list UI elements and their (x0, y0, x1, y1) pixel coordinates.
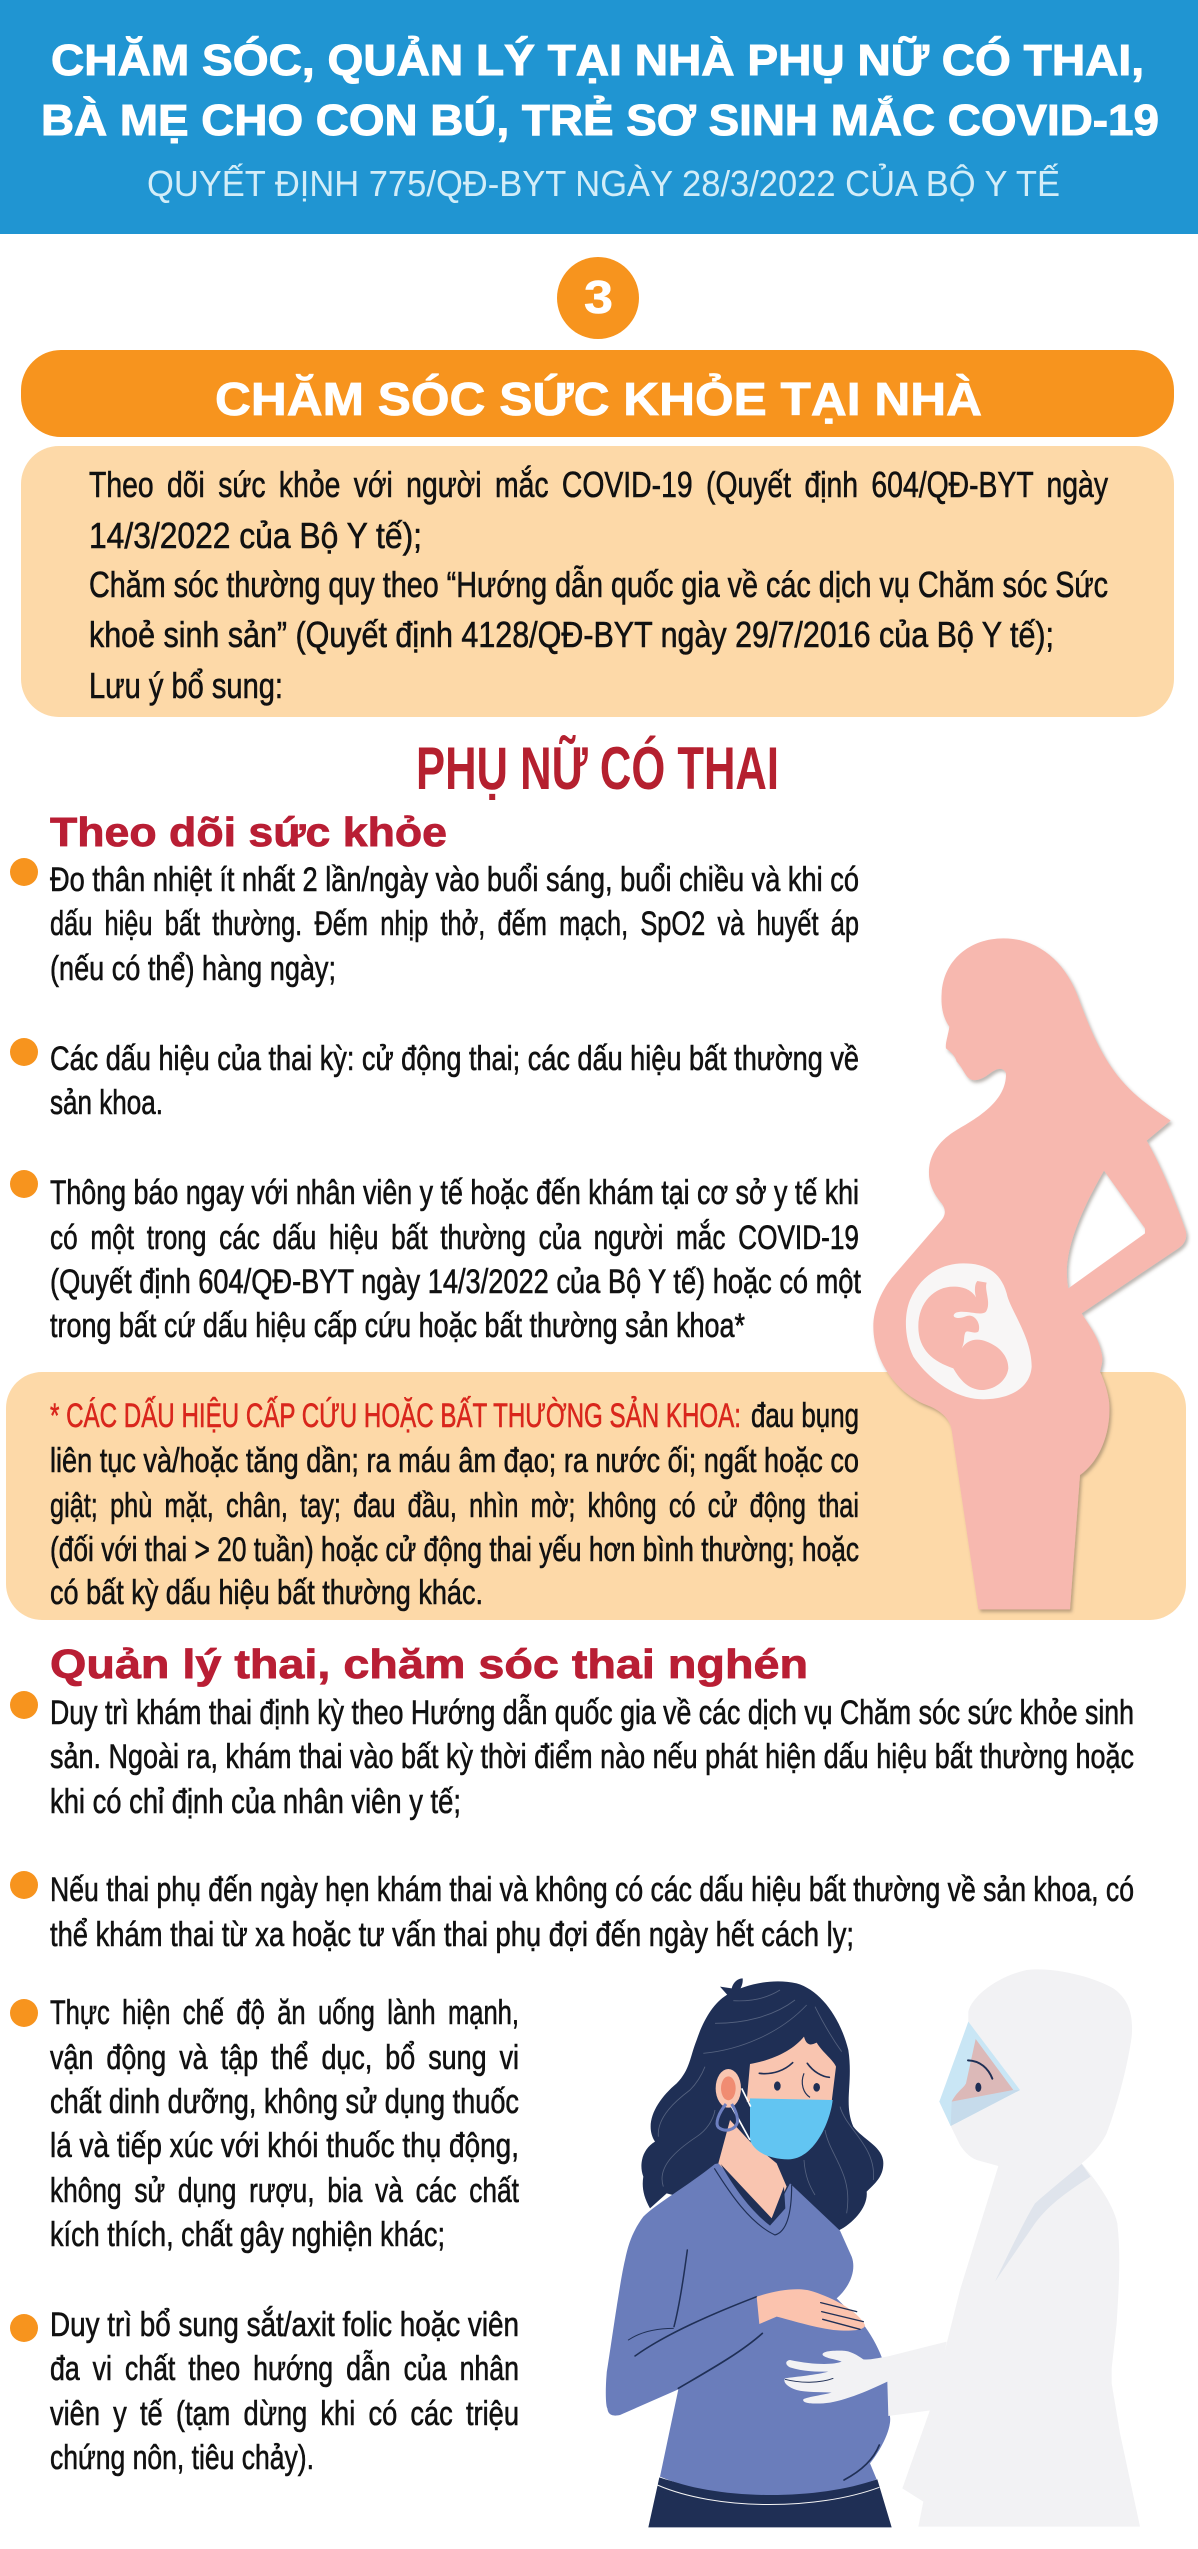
bullet: healthy diet: chất dinh dưỡng, không sử dụng thuốc (50, 2083, 519, 2121)
bullet: temperature: dấu hiệu bất thường. Đếm nhịp thở, đếm mạch, SpO2 và huyết áp (50, 905, 859, 943)
bullet: iron and folic acid: viên y tế (tạm dừng khi có các triệu (50, 2395, 519, 2433)
suit collar (995, 2164, 1091, 2282)
bullet: notify medical staff: trong bất cứ dấu hiệu cấp cứu hoặc bất thường sản khoa* (50, 1307, 745, 1345)
bullet: regular checkups (10, 1691, 1134, 1821)
woman's hand (757, 2289, 947, 2416)
bullet: healthy diet: không sử dụng rượu, bia và các chất (50, 2172, 519, 2210)
subtitle: QUYẾT ĐỊNH 775/QĐ-BYT NGÀY 28/3/2022 CỦA BỘ Y TẾ (147, 162, 1060, 204)
title: CHĂM SÓC, QUẢN LÝ TẠI NHÀ PHỤ NỮ CÓ THAI, (51, 35, 1144, 85)
panel: emergency signs callout: * CÁC DẤU HIỆU CẤP CỨU HOẶC BẤT THƯỜNG SẢN KHOA: (50, 1397, 741, 1435)
illustration: pregnant silhouette (873, 938, 1186, 1609)
earring (717, 2104, 737, 2130)
title: BÀ MẸ CHO CON BÚ, TRẺ SƠ SINH MẮC COVID-19 (41, 95, 1159, 145)
hair (641, 1978, 883, 2231)
section heading bar: CHĂM SÓC SỨC KHỎE TẠI NHÀ (215, 373, 982, 425)
bullet: remote checkups (10, 1871, 1134, 1954)
panel: emergency signs callout (6, 1372, 1186, 1620)
panel: intro notes: Lưu ý bổ sung: (89, 665, 283, 706)
bullet: iron and folic acid: Duy trì bổ sung sắt/axit folic hoặc viên (50, 2306, 519, 2344)
number badge 3: 3 (584, 271, 613, 323)
bullet: pregnancy signs: Các dấu hiệu của thai kỳ: cử động thai; các dấu hiệu bất thường về (50, 1040, 859, 1078)
bullet: regular checkups: khi có chỉ định của nhân viên y tế; (50, 1783, 461, 1821)
subheading: pregnancy management: Quản lý thai, chăm sóc thai nghén (50, 1641, 808, 1687)
ear (716, 2069, 741, 2108)
illustration: pregnant woman with mask (606, 1978, 947, 2527)
bullet: temperature (10, 858, 859, 988)
number badge 3 (557, 257, 639, 339)
bullet: temperature: (nếu có thể) hàng ngày; (50, 950, 336, 988)
icon: womb (906, 1263, 1032, 1399)
heading: pregnant women: PHỤ NỮ CÓ THAI (416, 735, 779, 802)
icon: fetus (918, 1281, 1008, 1390)
illustration: doctor in protective suit (902, 1969, 1140, 2527)
bullet: pregnancy signs (10, 1038, 859, 1122)
panel: intro notes (21, 446, 1174, 717)
subheading: health monitoring: Theo dõi sức khỏe (50, 809, 447, 855)
title (41, 35, 1159, 145)
section heading bar (21, 350, 1174, 437)
bullet: healthy diet: lá và tiếp xúc với khói thuốc thụ động, (50, 2127, 519, 2165)
sweater (606, 2163, 890, 2495)
bullet: pregnancy signs: sản khoa. (50, 1084, 163, 1122)
bullet: iron and folic acid: chứng nôn, tiêu chảy). (50, 2439, 314, 2477)
bullet: healthy diet: vận động và tập thể dục, bổ sung vi (50, 2039, 519, 2077)
bullet: remote checkups: thể khám thai từ xa hoặc tư vấn thai phụ đợi đến ngày hết cách ly; (50, 1916, 854, 1954)
face shield (939, 2022, 1020, 2126)
bullet: iron and folic acid (10, 2306, 519, 2477)
eyes and brows (774, 2081, 781, 2091)
panel: emergency signs callout: (đối với thai > 20 tuần) hoặc cử động thai yếu hơn bình thường; hoặc (50, 1531, 859, 1569)
bullet: notify medical staff: (Quyết định 604/QĐ-BYT ngày 14/3/2022 của Bộ Y tế) hoặc có một (50, 1263, 861, 1301)
bullet: notify medical staff (10, 1170, 861, 1345)
face (747, 2037, 836, 2102)
neck (718, 2120, 787, 2218)
panel: emergency signs callout: liên tục và/hoặc tăng dần; ra máu âm đạo; ra nước ối; ngất hoặc co (50, 1442, 859, 1480)
bullet: healthy diet (10, 1994, 519, 2254)
bullet: notify medical staff: có một trong các dấu hiệu bất thường của người mắc COVID-19 (50, 1219, 859, 1257)
bullet: iron and folic acid: đa vi chất theo hướng dẫn của nhân (50, 2350, 519, 2388)
header banner (0, 0, 1198, 234)
panel: intro notes: khoẻ sinh sản” (Quyết định 4128/QĐ-BYT ngày 29/7/2016 của Bộ Y tế); (89, 614, 1054, 655)
sweater folds (628, 2250, 879, 2480)
panel: emergency signs callout: có bất kỳ dấu hiệu bất thường khác. (50, 1574, 483, 1612)
panel: intro notes: 14/3/2022 của Bộ Y tế); (89, 515, 422, 556)
doctor's sleeve and hand (784, 2342, 947, 2416)
collar (721, 2164, 785, 2226)
pants (648, 2477, 892, 2527)
bullet: temperature: Đo thân nhiệt ít nhất 2 lần/ngày vào buổi sáng, buổi chiều và khi có (50, 861, 859, 899)
bullet: notify medical staff: Thông báo ngay với nhân viên y tế hoặc đến khám tại cơ sở y tế khi (50, 1174, 859, 1212)
bullet: healthy diet: kích thích, chất gây nghiện khác; (50, 2216, 445, 2254)
panel: emergency signs callout: giật; phù mặt, chân, tay; đau đầu, nhìn mờ; không có cử động thai (50, 1487, 859, 1525)
panel: emergency signs callout: đau bụng (751, 1397, 859, 1435)
mask (750, 2098, 833, 2159)
bullet: healthy diet: Thực hiện chế độ ăn uống lành mạnh, (50, 1994, 519, 2032)
